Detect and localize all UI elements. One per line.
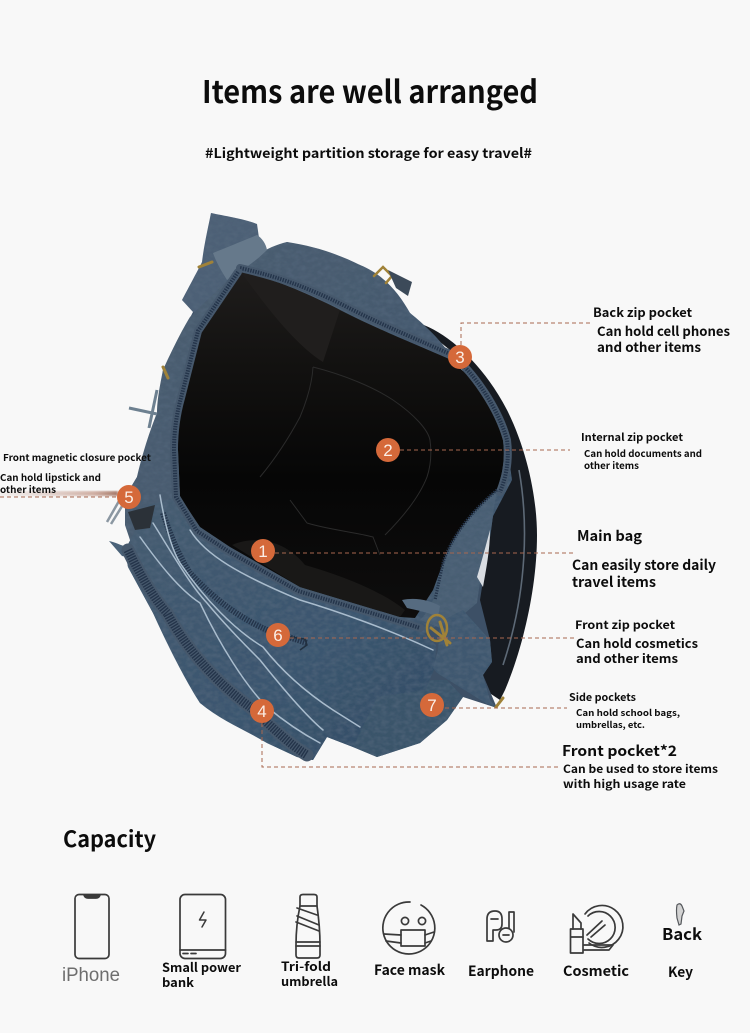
- icon: key: [676, 904, 684, 925]
- callout: front zip pocket: [575, 617, 698, 667]
- badge 1: [251, 539, 275, 563]
- icon: umbrella: [296, 894, 320, 958]
- panel stitch: [190, 530, 433, 650]
- label: tri-fold umbrella: [281, 956, 338, 990]
- badge 2: [376, 438, 400, 462]
- side pull: [129, 390, 157, 428]
- bag base silhouette: [125, 242, 505, 760]
- ring hardware: [163, 262, 503, 707]
- leader line 4: [262, 723, 560, 767]
- outer zipper teeth: [128, 550, 307, 755]
- callout: front pocket: Front pocket*2: [562, 740, 677, 761]
- label: small power bank: Small power: [162, 957, 242, 976]
- label: earphone: Earphone: [468, 961, 534, 981]
- badge 6: [266, 623, 290, 647]
- icon: iPhone: [75, 894, 109, 958]
- charm clip left: [107, 501, 124, 524]
- left zip band: [174, 272, 420, 628]
- light gap in wall: [477, 530, 490, 587]
- callout: front magnetic closure pocket: other items: [0, 482, 56, 496]
- callout: main bag: Main bag: [577, 525, 642, 546]
- interior lining: [178, 271, 504, 618]
- callout: front zip pocket: and other items: [576, 648, 678, 667]
- leader line 5: [0, 491, 118, 497]
- badge 3: 3: [455, 348, 465, 367]
- inner front zipper: [163, 513, 307, 643]
- callout: front magnetic closure pocket: [0, 450, 151, 496]
- left zip teeth: [174, 272, 420, 628]
- back zip band: [240, 268, 508, 492]
- front pockets: [125, 497, 436, 760]
- callout: main bag: travel items: [572, 572, 656, 592]
- carrying loop: [213, 235, 267, 280]
- badge 2: 2: [383, 441, 393, 460]
- callout: front zip pocket: Can hold cosmetics: [576, 633, 698, 652]
- callout: front magnetic closure pocket: Front magnetic closure pocket: [3, 450, 151, 464]
- back zip teeth: [240, 268, 508, 492]
- label: small power bank: bank: [162, 972, 194, 991]
- badge 4: [250, 699, 274, 723]
- callout: internal zip pocket: other items: [584, 458, 639, 472]
- badge 1: 1: [258, 542, 268, 561]
- callout: front zip pocket: Front zip pocket: [575, 617, 675, 633]
- callout: side pockets: Side pockets: [569, 690, 636, 705]
- badge 5: 5: [124, 488, 134, 507]
- icon: cosmetic: [570, 905, 623, 953]
- label: iPhone: iPhone: [62, 965, 120, 986]
- callout: front pocket: Can be used to store items: [563, 761, 719, 777]
- pocket stitching: [140, 537, 320, 743]
- icon: power bank: [180, 894, 226, 958]
- callout: internal zip pocket: Internal zip pocket: [581, 430, 684, 445]
- badge 7: [420, 693, 444, 717]
- badge 6: 6: [273, 626, 283, 645]
- leader line 3: [461, 323, 592, 345]
- strap loop: [402, 599, 440, 617]
- callout: internal zip pocket: [581, 430, 702, 472]
- back panel highlight strip: [503, 470, 524, 665]
- internal pocket stitching: [260, 367, 431, 555]
- callout: main bag: [572, 525, 716, 592]
- label: tri-fold umbrella: umbrella: [281, 971, 338, 990]
- callout: back zip pocket: Can hold cell phones: [597, 321, 730, 340]
- callout: front magnetic closure pocket: Can hold lipstick and: [0, 470, 101, 484]
- title: Items are well arranged: [202, 67, 538, 112]
- badge 7: 7: [427, 696, 437, 715]
- callout: side pockets: umbrellas, etc.: [576, 718, 645, 731]
- label: tri-fold umbrella: Tri-fold: [281, 956, 331, 975]
- label: key: Key: [668, 962, 693, 982]
- rear tab: [109, 541, 132, 558]
- badge 5: [117, 485, 141, 509]
- callout: front pocket: [562, 740, 719, 792]
- label: cosmetic: Cosmetic: [563, 961, 629, 981]
- side strap: [433, 610, 497, 708]
- leader line 7: [445, 707, 567, 709]
- callout: main bag: Can easily store daily: [572, 555, 716, 575]
- pocket stitching two: [153, 523, 323, 730]
- label: face mask: Face mask: [374, 960, 446, 980]
- icon: face mask: [383, 902, 435, 954]
- callout: back zip pocket: and other items: [597, 337, 701, 356]
- leader line 6: [290, 637, 575, 639]
- leader line 2: [400, 449, 570, 451]
- callout: back zip pocket: Back zip pocket: [593, 302, 693, 321]
- zip pull 6: [290, 637, 307, 650]
- bag illustration: [107, 213, 537, 760]
- main bag body: [125, 242, 512, 740]
- leader line 1: [275, 552, 575, 554]
- right wall zip: [435, 490, 497, 600]
- lower lining highlight: [232, 540, 405, 617]
- top handle flap: [182, 213, 259, 315]
- label: small power bank: [162, 957, 242, 991]
- inner pocket stitching: [160, 495, 360, 727]
- clasp shadow: [128, 505, 155, 530]
- lower side pocket: [353, 680, 463, 757]
- subtitle: #Lightweight partition storage for easy travel#: [205, 142, 532, 162]
- outer zipper band: [128, 550, 307, 755]
- callout: side pockets: Can hold school bags,: [576, 706, 680, 719]
- badge 4: 4: [257, 702, 267, 721]
- back dark panel: [415, 322, 537, 700]
- right pocket wall: [420, 490, 497, 630]
- callout: side pockets: [569, 690, 680, 731]
- label: back: Back: [662, 921, 702, 945]
- callout: internal zip pocket: Can hold documents and: [584, 446, 702, 460]
- callout: front pocket: with high usage rate: [563, 776, 686, 792]
- callout: back zip pocket: [593, 302, 730, 356]
- badge 3: [448, 345, 472, 369]
- upper lining fold: [240, 271, 340, 362]
- capacity heading: Capacity: [63, 822, 156, 854]
- icon: earphone: [487, 911, 514, 942]
